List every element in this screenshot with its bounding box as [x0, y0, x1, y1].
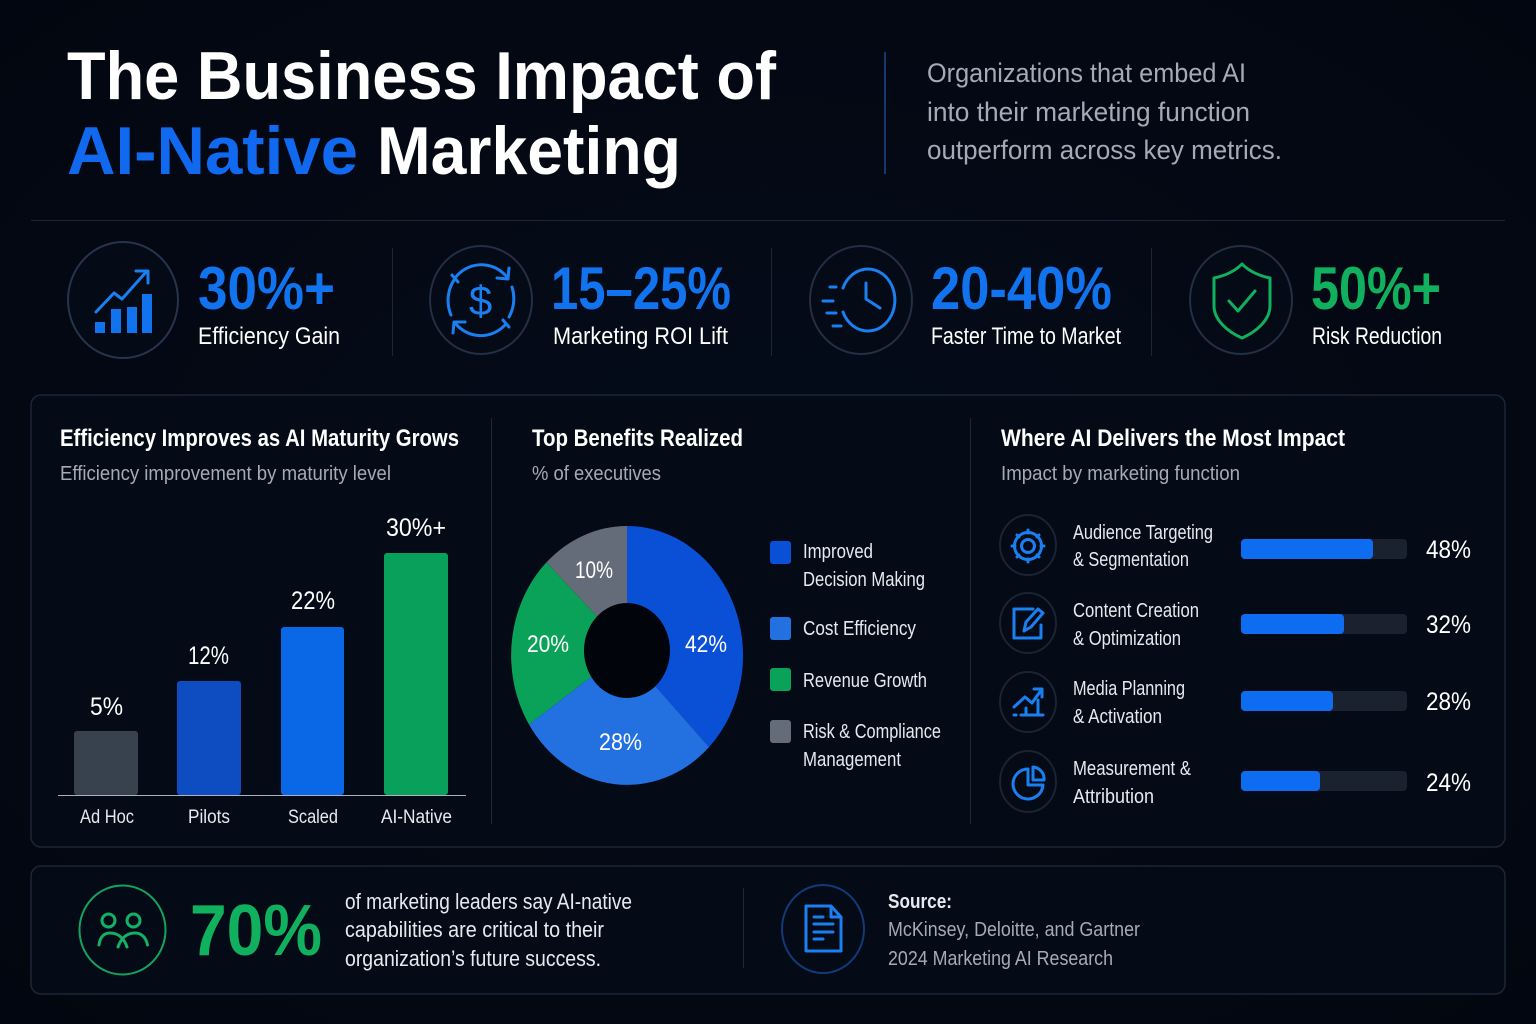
bar chart: Scaled [288, 807, 338, 828]
source: Source: [888, 891, 952, 913]
bar chart: Ad Hoc [80, 807, 134, 828]
icon: edit pencil [1000, 593, 1056, 653]
legend [770, 541, 941, 771]
callout text: organization’s future success. [345, 946, 601, 971]
KPI: faster time to market [810, 246, 1121, 354]
donut chart: 20% [527, 631, 569, 658]
row: media planning: Media Planning [1073, 678, 1185, 700]
row: content creation [1000, 593, 1471, 653]
KPI: efficiency gain: 30%+ [198, 255, 335, 322]
subheading: impact: Impact by marketing function [1001, 463, 1240, 485]
row: media planning: 28% [1426, 688, 1471, 716]
stat: 70%: 70% [190, 891, 322, 971]
icon: people [80, 886, 166, 974]
intro text: outperform across key metrics. [927, 135, 1282, 165]
KPI: efficiency gain [68, 242, 340, 358]
title [67, 38, 776, 189]
KPI row [68, 242, 1442, 358]
source: 2024 Marketing AI Research [888, 948, 1113, 970]
row: measurement [1000, 751, 1471, 812]
KPI: marketing ROI lift [430, 246, 731, 354]
panel: impact by function [1000, 425, 1471, 812]
panel: efficiency by maturity [58, 425, 466, 828]
main panel [31, 395, 1505, 847]
KPI: risk reduction: Risk Reduction [1312, 323, 1442, 350]
KPI: risk reduction [1190, 246, 1442, 354]
heading: benefits: Top Benefits Realized [532, 425, 743, 452]
legend: Cost Efficiency [803, 618, 916, 640]
icon: rising bar chart [68, 242, 178, 358]
icon: speed clock [810, 246, 912, 354]
KPI: faster time to market: Faster Time to Market [931, 323, 1121, 350]
row: media planning [1000, 672, 1471, 732]
row: media planning: & Activation [1073, 706, 1162, 728]
bar chart: 5% [90, 693, 123, 721]
row: audience targeting: 48% [1426, 536, 1471, 564]
KPI: risk reduction: 50%+ [1311, 255, 1441, 322]
row: audience targeting [1000, 515, 1471, 575]
row: measurement: Measurement & [1073, 758, 1192, 780]
KPI: marketing ROI lift: Marketing ROI Lift [553, 323, 728, 350]
source [888, 891, 1140, 970]
bar chart: Pilots [188, 807, 230, 828]
row: content creation: & Optimization [1073, 628, 1181, 650]
icon: dollar cycle: $ [469, 277, 492, 324]
heading: efficiency: Efficiency Improves as AI Maturity Grows [60, 425, 459, 452]
bar chart: 22% [291, 587, 335, 615]
legend: Improved [803, 541, 873, 563]
icon: pie chart [1000, 751, 1056, 812]
title: AI-Native [67, 113, 358, 189]
bar chart [58, 514, 466, 828]
callout text: capabilities are critical to their [345, 917, 604, 942]
subheading: efficiency: Efficiency improvement by maturity level [60, 463, 391, 485]
KPI: faster time to market: 20-40% [931, 255, 1112, 322]
bar chart: AI-Native [381, 807, 452, 828]
donut chart: 10% [575, 557, 613, 584]
row: content creation: Content Creation [1073, 600, 1199, 622]
legend: Risk & Compliance [803, 721, 941, 743]
icon: target [1000, 515, 1056, 575]
donut chart [511, 526, 743, 785]
row: audience targeting: & Segmentation [1073, 549, 1189, 571]
title: The Business Impact of [67, 38, 776, 114]
bar chart: 12% [188, 642, 229, 670]
icon: shield check [1190, 246, 1292, 354]
KPI: efficiency gain: Efficiency Gain [198, 323, 340, 350]
bar chart: 30%+ [386, 514, 446, 542]
callout text [345, 889, 632, 971]
legend: Decision Making [803, 569, 925, 591]
intro text [927, 58, 1282, 165]
callout text: of marketing leaders say AI-native [345, 889, 632, 914]
title: Marketing [377, 113, 681, 189]
donut chart: 42% [685, 631, 727, 658]
row: audience targeting: Audience Targeting [1073, 522, 1213, 544]
source: McKinsey, Deloitte, and Gartner [888, 919, 1140, 941]
icon: media chart [1000, 672, 1056, 732]
bottom banner [31, 866, 1505, 994]
row: content creation: 32% [1426, 611, 1471, 639]
heading: impact: Where AI Delivers the Most Impact [1001, 425, 1345, 452]
subheading: benefits: % of executives [532, 463, 661, 485]
intro text: into their marketing function [927, 97, 1250, 127]
row: measurement: 24% [1426, 769, 1471, 797]
donut chart: 28% [599, 729, 642, 756]
legend: Management [803, 749, 901, 771]
intro text: Organizations that embed AI [927, 58, 1246, 88]
KPI: marketing ROI lift: 15–25% [551, 255, 731, 322]
icon: dollar cycle [430, 246, 532, 354]
legend: Revenue Growth [803, 670, 927, 692]
icon: document [782, 885, 864, 973]
panel: top benefits [511, 425, 941, 785]
row: measurement: Attribution [1073, 786, 1154, 808]
